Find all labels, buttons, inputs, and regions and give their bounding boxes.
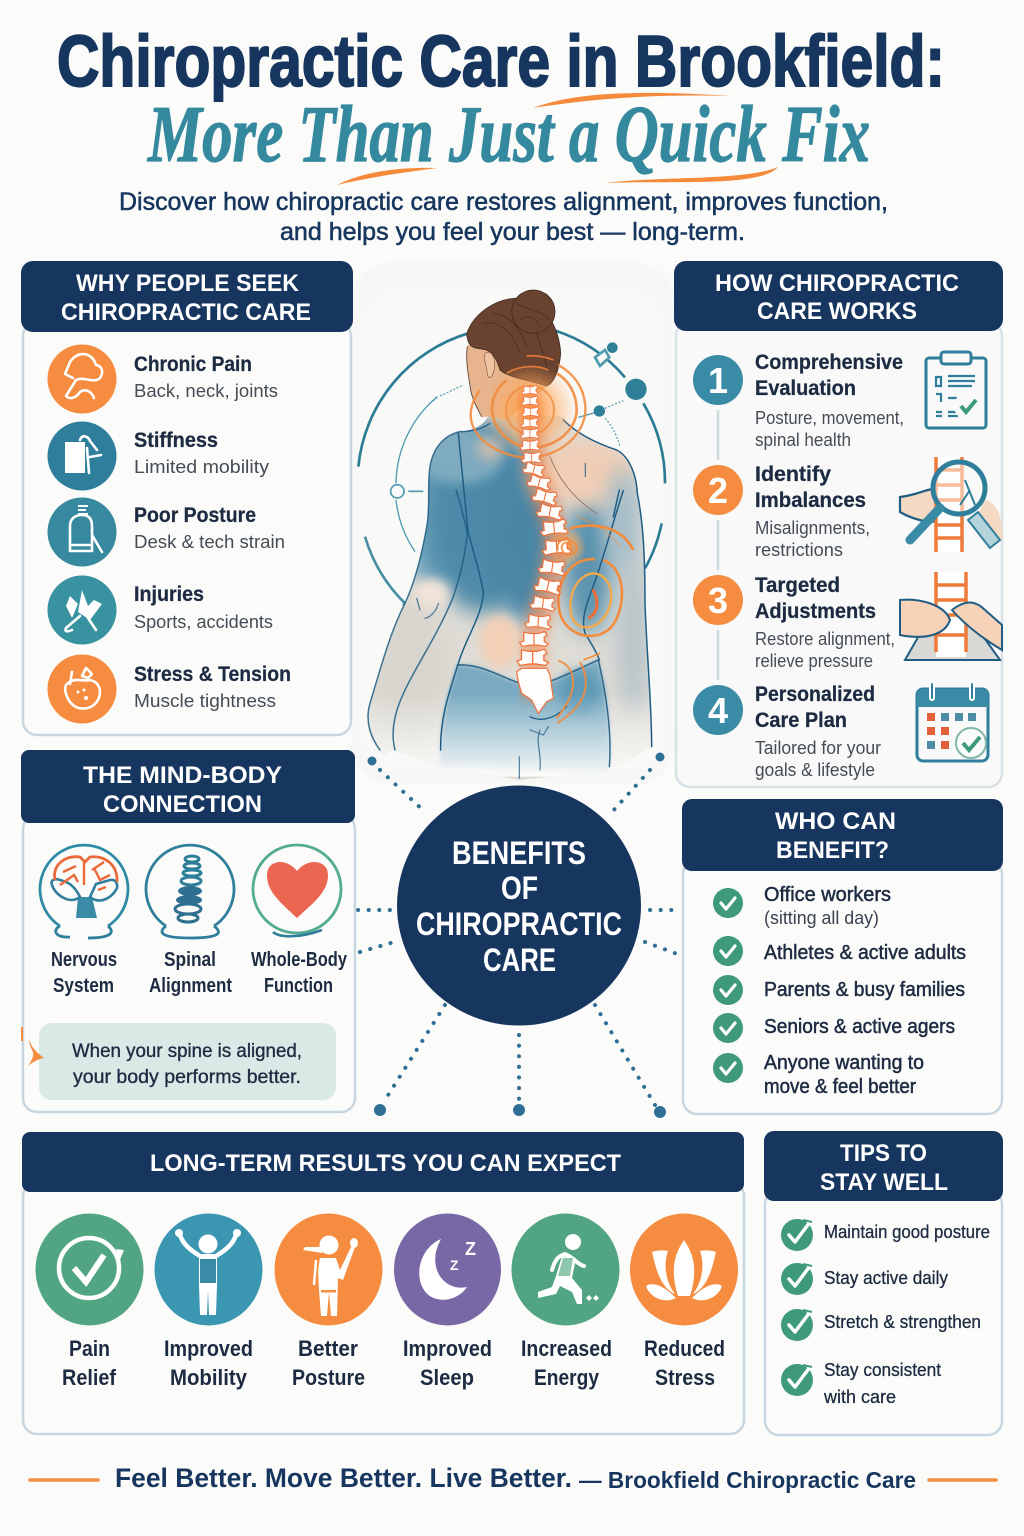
tip list: Maintain good posture (824, 1221, 990, 1242)
result: better posture: Posture (292, 1365, 365, 1390)
result: improved mobility: Improved (164, 1336, 253, 1361)
heading: how it works (715, 270, 959, 325)
result: increased energy: Energy (534, 1365, 600, 1390)
panel: who can benefit (682, 799, 1003, 1114)
footer tagline: Feel Better. Move Better. Live Better. (115, 1463, 572, 1493)
heading: tips (820, 1140, 948, 1196)
panel: how chiropractic care works (674, 261, 1003, 787)
item: spinal alignment (146, 845, 234, 997)
central illustration: back and spine (357, 290, 666, 780)
step 3: Restore alignment, (755, 628, 895, 649)
step 2: 2 (708, 470, 728, 511)
item: injuries (48, 576, 273, 644)
item: stress and tension (48, 654, 291, 724)
icon: clipboard (926, 352, 986, 428)
item: nervous system: System (53, 975, 114, 997)
tip list (781, 1219, 990, 1407)
checklist: move & feel better (764, 1076, 916, 1098)
heading: why people seek: CHIROPRACTIC CARE (61, 299, 311, 326)
item: whole-body function: Function (264, 975, 333, 997)
result: improved mobility: Mobility (170, 1365, 248, 1390)
step 4: goals & lifestyle (755, 759, 875, 780)
intro text: Discover how chiropractic care restores alignment, improves function, (119, 188, 888, 216)
step 2: Identify (755, 463, 831, 486)
benefits circle (397, 786, 641, 1026)
result: improved sleep: Z (465, 1239, 476, 1259)
panel: mind-body connection (21, 750, 355, 1112)
checklist (713, 884, 966, 1098)
item: nervous system: Nervous (51, 949, 117, 971)
item: poor posture: Poor Posture (134, 504, 256, 527)
body (368, 414, 651, 780)
result: improved sleep: Improved (403, 1336, 492, 1361)
result: pain relief (36, 1214, 144, 1390)
heading: long-term results: LONG-TERM RESULTS YOU CAN EXPECT (150, 1150, 621, 1177)
result: improved mobility (154, 1214, 262, 1390)
heading: tips: TIPS TO (840, 1140, 927, 1167)
checklist: Office workers (764, 884, 891, 906)
checklist: Athletes & active adults (764, 942, 966, 964)
orbit rings (358, 330, 665, 643)
tip list: Stay active daily (824, 1267, 949, 1288)
step 3: Targeted (755, 574, 840, 597)
intro text: and helps you feel your best — long-term. (280, 218, 745, 246)
result: improved sleep: Z (450, 1257, 459, 1273)
item: chronic pain: Back, neck, joints (134, 380, 278, 401)
item: poor posture: Desk & tech strain (134, 531, 285, 552)
step 4: 4 (708, 690, 728, 731)
panel: tips to stay well (764, 1131, 1003, 1435)
item: injuries: Sports, accidents (134, 611, 273, 632)
orange rings (471, 363, 633, 723)
footer tagline (30, 1463, 996, 1493)
item: chronic pain (48, 344, 278, 414)
item: stiffness: Limited mobility (134, 456, 270, 477)
item: injuries: Injuries (134, 583, 204, 606)
step 3 (693, 574, 895, 671)
result: improved sleep: Sleep (420, 1365, 474, 1390)
benefits circle: CHIROPRACTIC (416, 906, 622, 942)
step 4 (693, 683, 881, 780)
step 4: Care Plan (755, 709, 847, 732)
icon: adjustment hands (900, 572, 1002, 660)
step 1: Evaluation (755, 377, 856, 400)
result: reduced stress: Reduced (644, 1336, 725, 1361)
heading: how it works: HOW CHIROPRACTIC (715, 270, 959, 297)
tip list: with care (823, 1386, 896, 1407)
item: poor posture (48, 498, 285, 566)
checklist: Parents & busy families (764, 979, 965, 1001)
benefits circle: BENEFITS (452, 835, 586, 871)
step 1: Posture, movement, (755, 407, 904, 428)
dotted connectors (358, 752, 680, 1118)
result: improved sleep (394, 1214, 501, 1390)
step 1: Comprehensive (755, 351, 903, 374)
benefits circle: CARE (483, 942, 556, 978)
swooshes (337, 93, 778, 185)
heading: why people seek: WHY PEOPLE SEEK (76, 270, 299, 297)
item: spinal alignment: Spinal (164, 949, 216, 971)
heading: who can benefit: WHO CAN (775, 808, 896, 835)
step 3: 3 (708, 580, 728, 621)
checklist: Anyone wanting to (764, 1052, 924, 1074)
item: stiffness: Stiffness (134, 429, 218, 452)
result: increased energy (512, 1214, 620, 1390)
heading: why people seek (61, 270, 311, 326)
checklist: Seniors & active agers (764, 1016, 955, 1038)
step 3: relieve pressure (755, 650, 873, 671)
item: stress and tension: Muscle tightness (134, 690, 276, 711)
heading: mind-body: THE MIND-BODY (83, 762, 282, 789)
intro text (119, 188, 888, 246)
result: better posture: Better (298, 1336, 358, 1361)
callout: your body performs better. (73, 1066, 301, 1088)
heading: tips: STAY WELL (820, 1169, 948, 1196)
item: spinal alignment: Alignment (149, 975, 232, 997)
step 2: Imbalances (755, 489, 866, 512)
heading: who can benefit (775, 808, 896, 864)
item: chronic pain: Chronic Pain (134, 353, 252, 376)
tip list: Stretch & strengthen (824, 1311, 981, 1332)
panel: why people seek chiropractic care (21, 261, 353, 735)
step 1 (693, 351, 904, 450)
head and hair (467, 290, 561, 420)
checklist: (sitting all day) (764, 908, 879, 928)
result: increased energy: Increased (521, 1336, 612, 1361)
step 2: restrictions (755, 539, 843, 560)
heading: how it works: CARE WORKS (757, 298, 917, 325)
icon: magnifier on spine (900, 457, 1002, 552)
footer tagline: — Brookfield Chiropractic Care (579, 1467, 916, 1493)
item: nervous system (40, 845, 128, 997)
icon: calendar (917, 684, 988, 761)
step 3: Adjustments (755, 600, 876, 623)
heading: who can benefit: BENEFIT? (776, 837, 889, 864)
step 4: Personalized (755, 683, 875, 706)
step 4: Tailored for your (755, 737, 881, 758)
callout (22, 1023, 336, 1100)
result: reduced stress: Stress (655, 1365, 715, 1390)
result: pain relief: Pain (69, 1336, 110, 1361)
step 2: Misalignments, (755, 517, 870, 538)
step 1: spinal health (755, 429, 851, 450)
result: pain relief: Relief (62, 1365, 117, 1390)
spine (517, 386, 577, 713)
heading: mind-body: CONNECTION (103, 791, 262, 818)
title (57, 22, 945, 185)
step 2 (693, 463, 870, 560)
item: stress and tension: Stress & Tension (134, 663, 291, 686)
result: better posture (274, 1214, 382, 1390)
item: stiffness (48, 422, 270, 490)
step 1: 1 (708, 360, 728, 401)
item: whole-body function: Whole-Body (251, 949, 348, 971)
body outline (368, 420, 652, 778)
benefits circle: OF (501, 870, 538, 906)
heading: mind-body (83, 762, 282, 818)
callout: When your spine is aligned, (72, 1040, 302, 1062)
item: whole-body function (251, 845, 348, 997)
tip list: Stay consistent (824, 1359, 941, 1380)
panel: long-term results (22, 1132, 744, 1434)
result: reduced stress (630, 1214, 738, 1390)
